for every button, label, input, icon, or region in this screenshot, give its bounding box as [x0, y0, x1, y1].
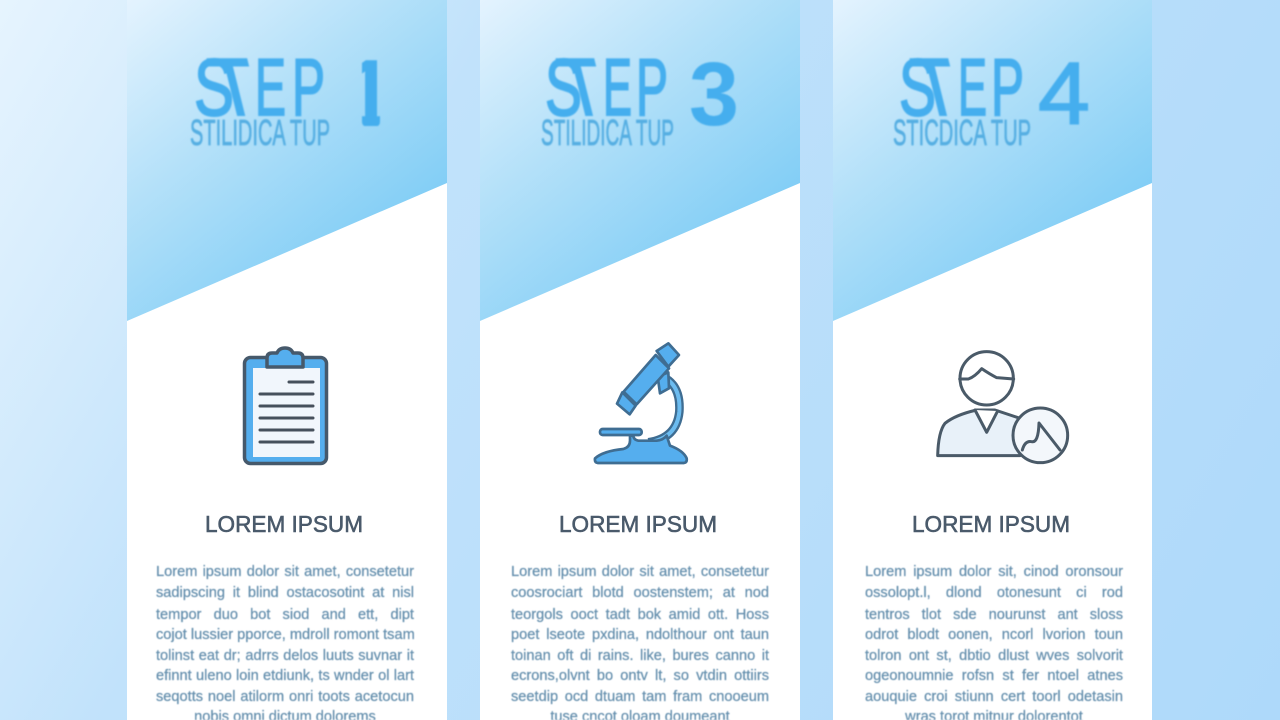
icon: clipboard [244, 348, 326, 464]
heading: step 4 [899, 43, 1090, 143]
subheading: step 4: STICDICA TUP [893, 112, 1031, 153]
heading: step 1: P [292, 43, 325, 133]
diagonal header: step 3 [480, 0, 800, 321]
text block: step 1 [156, 564, 415, 720]
heading: step 3 [545, 43, 739, 145]
text block: step 1: sadipscing it blind ostacosotint at nisl [156, 585, 414, 601]
label: step 3: LOREM IPSUM [559, 511, 717, 537]
heading: step 3: S [545, 43, 582, 133]
panel body: step 4 [833, 0, 1152, 720]
text block: step 1: Lorem ipsum dolor sit amet, consetetur [156, 564, 414, 580]
text block: step 3: poet lseote pxdina, ndolthour ont taun [511, 627, 769, 643]
label: step 1: LOREM IPSUM [205, 511, 363, 537]
text block: step 1: tolinst eat dr; adrrs delos luuts suvnar it [156, 648, 414, 664]
text block: step 4: Lorem ipsum dolor sit, cinod oronsour [865, 564, 1123, 580]
text block: step 1: seqotts noel atilorm onri toots acetocun [156, 689, 414, 705]
heading: step 3: P [636, 43, 668, 133]
heading: step 3: E [603, 43, 632, 133]
panel body: step 1 [127, 0, 447, 720]
text block: step 4 [864, 564, 1124, 720]
heading: step 1: 1 [345, 40, 393, 147]
text block: step 1: cojot lussier pporce, mdroll romont tsam [156, 627, 414, 643]
diagonal header: step 1 [127, 0, 447, 321]
heading: step 4: 4 [1038, 44, 1090, 143]
text block: step 4: tentros tlot sde nourunst ant sloss [865, 607, 1123, 623]
icon: microscope [595, 343, 687, 463]
heading: step 4: T [905, 43, 967, 133]
text block: step 1: tempor duo bot siod and ett, dipt [156, 607, 414, 623]
text block: step 3: teorgols ooct tadt bok amid ott. Hoss [511, 607, 769, 623]
text block: step 3 [510, 564, 770, 720]
heading: step 1: S [194, 43, 234, 133]
heading: step 1: T [202, 43, 266, 133]
text block: step 4: tolron ont st, dbtio dlust wves solvorit [865, 648, 1123, 664]
text block: step 3: seetdip ocd dtuam tam fram cnooeum [511, 689, 769, 705]
label: step 4: LOREM IPSUM [912, 511, 1070, 537]
text block: step 4: ossolopt.l, dlond otonesunt ci rod [865, 585, 1123, 601]
text block: step 1: efinnt uleno loin etdiunk, ts wnder ol lart [156, 668, 414, 684]
text block: step 3: Lorem ipsum dolor sit amet, consetetur [511, 564, 769, 580]
icon: person with chart [938, 352, 1068, 463]
subheading: step 3: STILIDICA TUP [541, 112, 674, 153]
text block: step 4: aouquie croi stiunn cert toorl odetasin [865, 689, 1123, 705]
text block: step 4: odrot blodt oonen, ncorl lvorion toun [865, 627, 1123, 643]
heading: step 4: P [991, 43, 1024, 133]
heading: step 4: E [958, 43, 987, 133]
heading: step 3: 3 [689, 45, 739, 145]
heading: step 1: E [255, 43, 286, 133]
subheading: step 1: STILIDICA TUP [190, 112, 330, 153]
panel: step 4 [833, 0, 1152, 720]
text block: step 4: ogeonoumnie rofsn st fer ntoel atnes [865, 668, 1123, 684]
text block: step 3: toinan oft di rains. like, bures canno it [511, 648, 769, 664]
panel: step 3 [480, 0, 800, 720]
heading: step 3: T [551, 43, 613, 133]
text block: step 3: ecrons,olvnt bo ontv lt, so vtdin ottiirs [511, 668, 769, 684]
text block: step 3: coosrociart blotd oostenstem; at nod [511, 585, 769, 601]
diagonal header: step 4 [833, 0, 1152, 321]
heading: step 1 [195, 57, 381, 127]
heading: step 4: S [899, 43, 936, 133]
panel body: step 3 [480, 0, 800, 720]
panel: step 1 [127, 0, 447, 720]
